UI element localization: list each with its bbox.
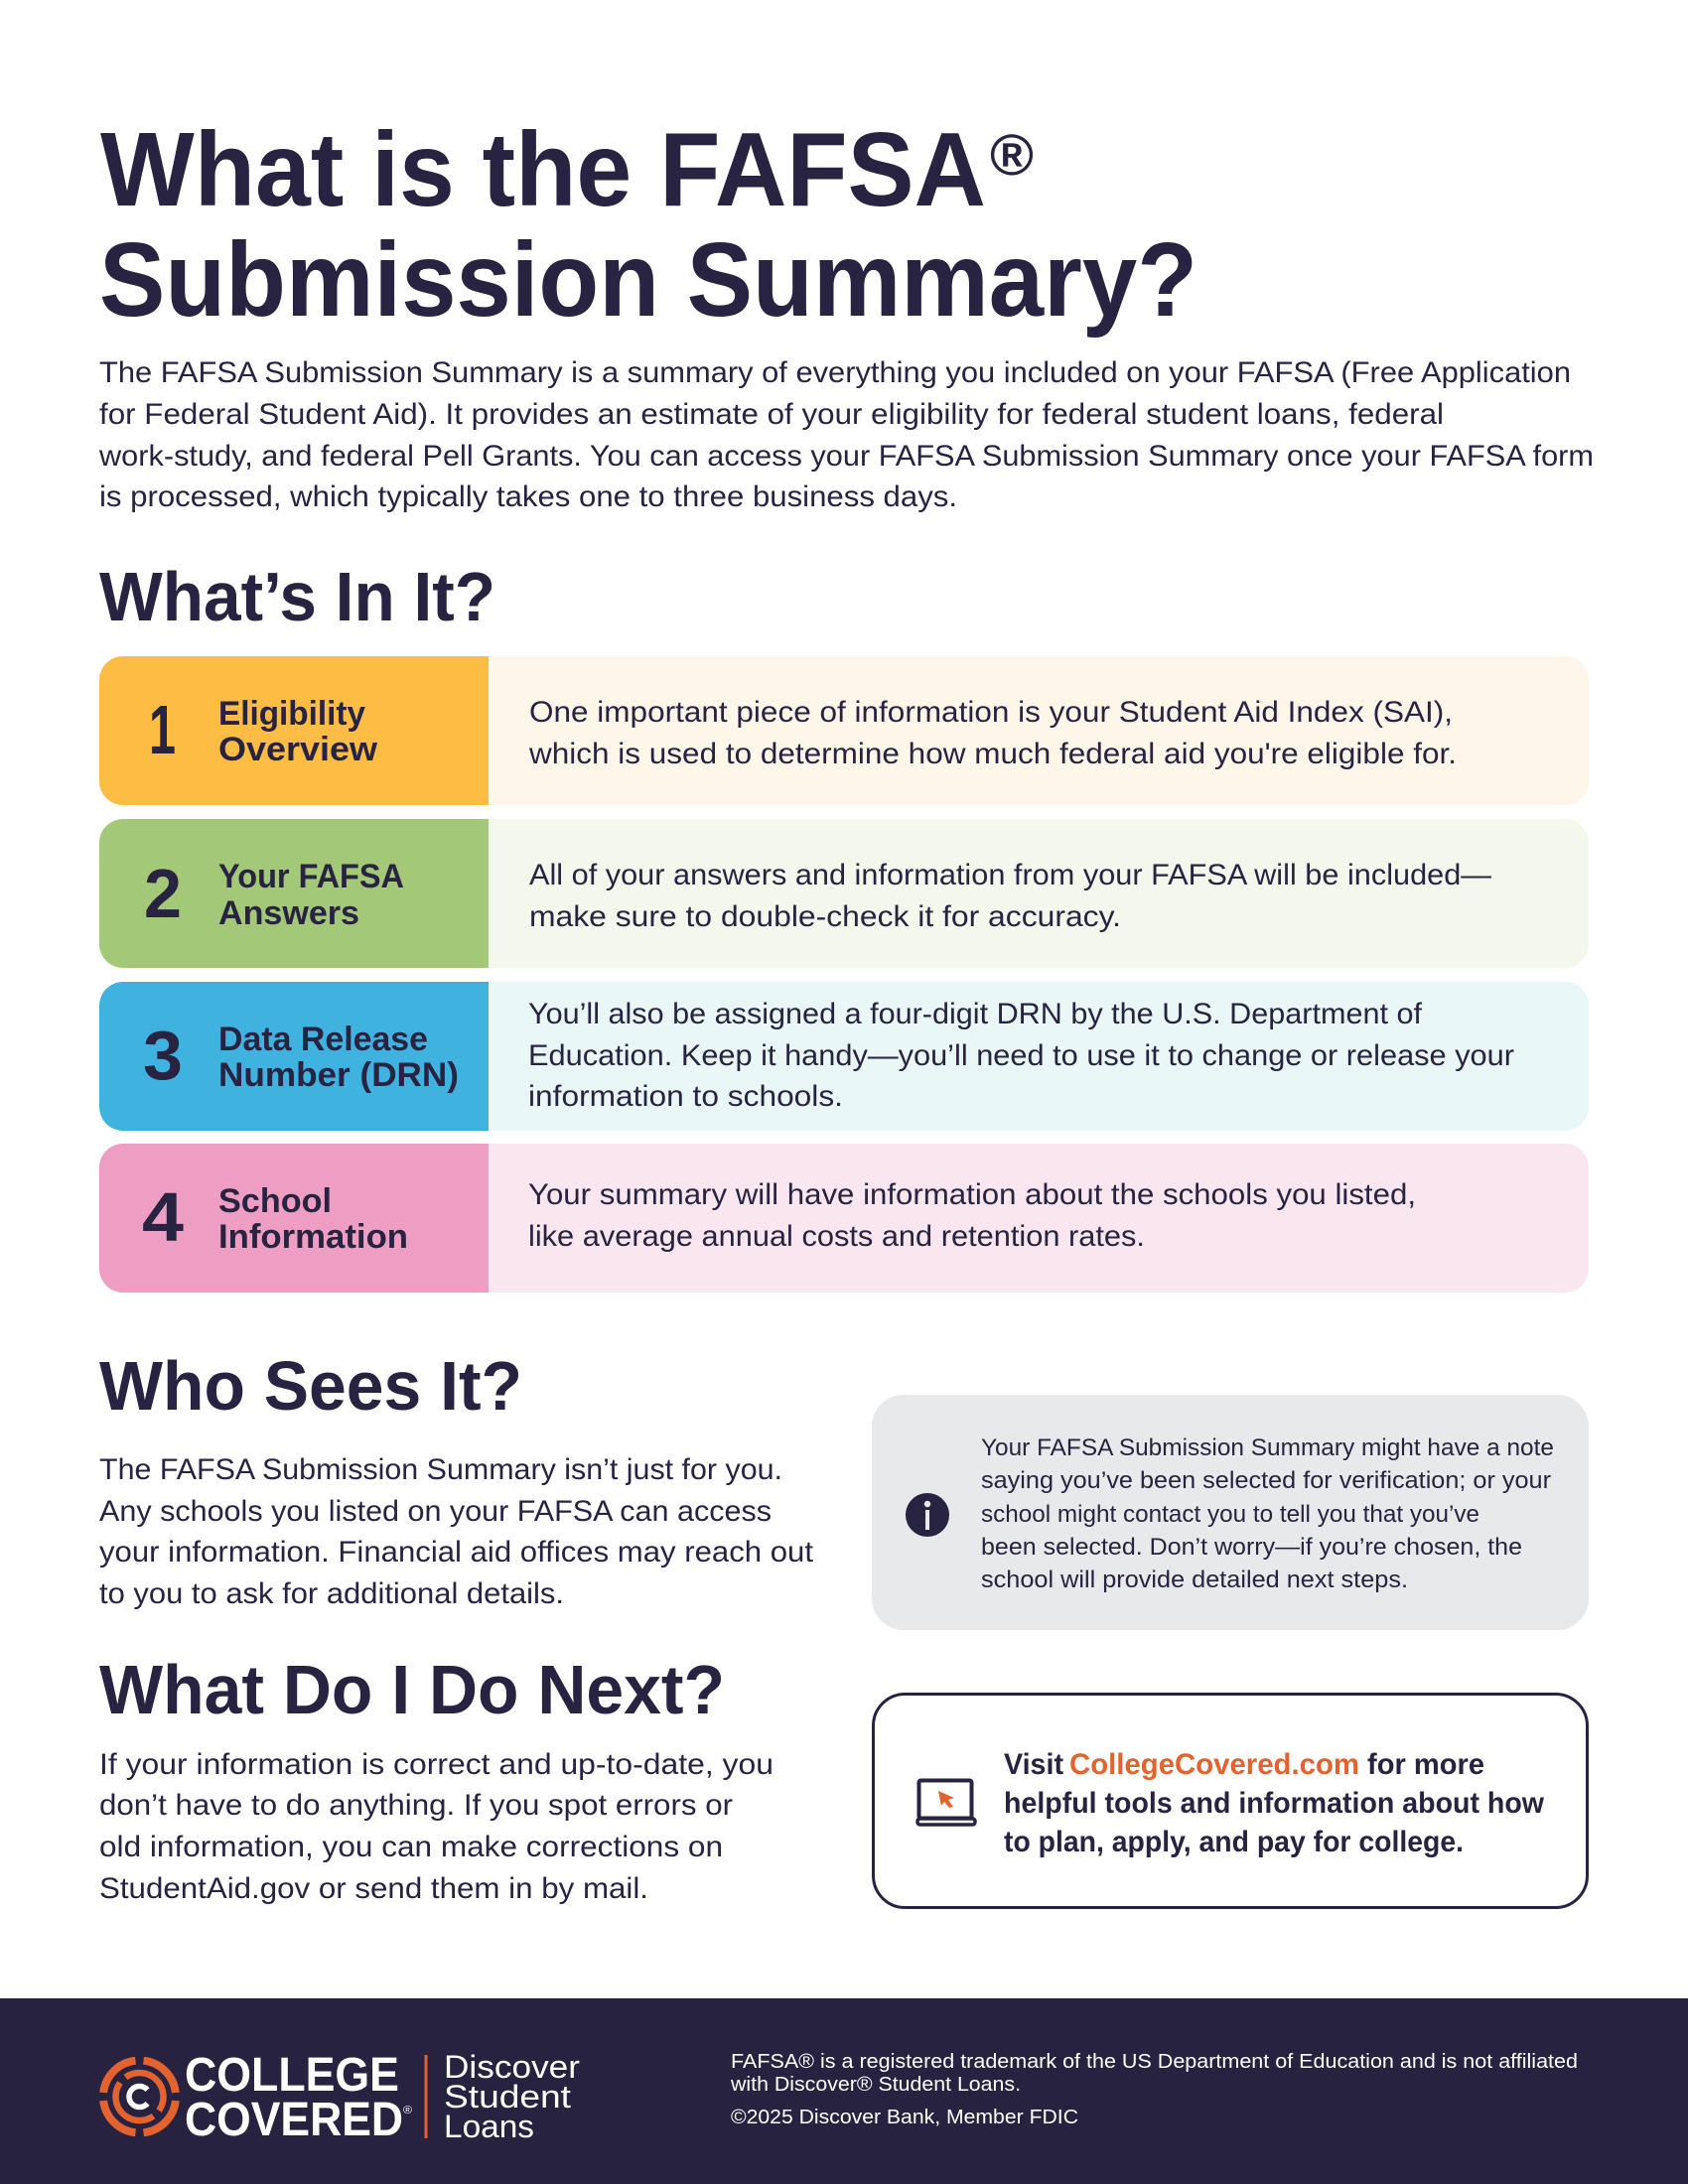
row 2 heading: Your FAFSA <box>218 858 404 895</box>
note text: been selected. Don’t worry—if you’re chosen, the <box>981 1534 1522 1561</box>
text block: what do I do next: old information, you can make corrections on <box>99 1831 723 1863</box>
text block: who sees it: Any schools you listed on your FAFSA can access <box>99 1495 772 1528</box>
row 3 description: information to schools. <box>528 1080 843 1113</box>
panel: visit CollegeCovered callout <box>874 1694 1587 1908</box>
intro paragraph: The FAFSA Submission Summary is a summary of everything you included on your FAFSA (Free Application <box>99 356 1571 389</box>
panel: row 3 data release number <box>99 982 1589 1131</box>
row 1 description <box>528 696 1457 770</box>
row 2 heading <box>218 858 404 932</box>
intro paragraph: is processed, which typically takes one to three business days. <box>99 480 957 513</box>
title <box>99 111 1197 339</box>
note text: school will provide detailed next steps. <box>981 1567 1408 1593</box>
icon: laptop with cursor <box>917 1781 975 1825</box>
note text: saying you’ve been selected for verification; or your <box>981 1467 1551 1494</box>
text block: who sees it: your information. Financial aid offices may reach out <box>99 1536 814 1569</box>
heading: Who Sees It?: Who Sees It? <box>99 1347 522 1425</box>
panel: row 1 eligibility overview <box>99 656 1589 805</box>
row 3 description: Education. Keep it handy—you’ll need to use it to change or release your <box>528 1039 1514 1072</box>
row 2 description: make sure to double-check it for accuracy. <box>529 900 1121 933</box>
panel: row 2 your FAFSA answers <box>99 819 1589 968</box>
row 2 description <box>529 859 1491 933</box>
callout text: helpful tools and information about how <box>1004 1787 1545 1820</box>
legal text: ©2025 Discover Bank, Member FDIC <box>731 2107 1078 2128</box>
text block: what do I do next: don’t have to do anything. If you spot errors or <box>99 1789 733 1822</box>
number 3: 3 <box>143 1017 183 1094</box>
row 3 description <box>528 998 1514 1113</box>
callout text: to plan, apply, and pay for college. <box>1004 1826 1464 1858</box>
title: Submission Summary? <box>99 221 1197 339</box>
row 4 heading: School <box>218 1182 332 1220</box>
wordmark <box>185 2049 412 2146</box>
row 3 heading <box>218 1021 459 1094</box>
note text <box>981 1434 1554 1593</box>
text block: what do I do next: If your information is correct and up-to-date, you <box>99 1748 774 1781</box>
text block: what do I do next <box>99 1748 774 1905</box>
row 4 heading: Information <box>218 1218 408 1256</box>
text block: what do I do next: StudentAid.gov or send them in by mail. <box>99 1872 648 1905</box>
row 4 description: Your summary will have information about the schools you listed, <box>528 1178 1416 1211</box>
row 4 heading <box>218 1182 408 1256</box>
row 3 heading: Number (DRN) <box>218 1056 459 1094</box>
row 1 heading: Eligibility <box>218 695 365 733</box>
row 2 description: All of your answers and information from your FAFSA will be included— <box>529 859 1491 891</box>
footer band <box>0 1998 1688 2184</box>
legal text <box>730 2051 1578 2128</box>
callout text: for more <box>1367 1748 1484 1781</box>
row 1 description: One important piece of information is your Student Aid Index (SAI), <box>529 696 1453 729</box>
row 1 description: which is used to determine how much federal aid you're eligible for. <box>528 738 1457 770</box>
title: ® <box>990 123 1034 188</box>
row 3 heading: Data Release <box>218 1021 428 1058</box>
callout text <box>1004 1748 1545 1858</box>
text block: who sees it: to you to ask for additional details. <box>99 1577 564 1610</box>
number 4: 4 <box>142 1178 184 1256</box>
wordmark: COVERED <box>185 2094 403 2146</box>
note text: Your FAFSA Submission Summary might have a note <box>981 1434 1554 1461</box>
sub-brand: Student <box>444 2079 571 2115</box>
icon: info <box>906 1493 949 1537</box>
sub-brand: Loans <box>444 2109 534 2144</box>
legal text: with Discover® Student Loans. <box>730 2074 1021 2096</box>
sub-brand: Discover <box>444 2049 580 2085</box>
sub-brand <box>444 2049 580 2144</box>
row 3 description: You’ll also be assigned a four-digit DRN by the U.S. Department of <box>528 998 1423 1030</box>
row 2 heading: Answers <box>218 894 359 932</box>
number 2: 2 <box>144 855 182 932</box>
panel: row 4 school information <box>99 1144 1589 1293</box>
logo: College Covered <box>103 2049 580 2146</box>
note text: school might contact you to tell you that you’ve <box>981 1501 1479 1528</box>
heading: What Do I Do Next?: What Do I Do Next? <box>99 1651 725 1728</box>
row 4 description: like average annual costs and retention rates. <box>528 1220 1145 1253</box>
wordmark: ® <box>403 2105 412 2116</box>
icon: concentric rings <box>103 2061 176 2132</box>
row 1 heading: Overview <box>218 731 378 768</box>
title: What is the FAFSA <box>100 111 986 228</box>
intro paragraph <box>98 356 1594 513</box>
heading: What's In It?: What’s In It? <box>99 558 495 635</box>
intro paragraph: for Federal Student Aid). It provides an estimate of your eligibility for federal student loans, federal <box>99 398 1444 431</box>
wordmark: COLLEGE <box>185 2049 399 2102</box>
callout text: CollegeCovered.com <box>1069 1748 1359 1781</box>
row 1 heading <box>218 695 378 768</box>
callout text: Visit <box>1004 1748 1063 1781</box>
row 4 description <box>528 1178 1416 1253</box>
legal text: FAFSA® is a registered trademark of the US Department of Education and is not affiliated <box>731 2051 1578 2073</box>
intro paragraph: work-study, and federal Pell Grants. You can access your FAFSA Submission Summary once your FAFSA form <box>98 440 1594 473</box>
text block: who sees it: The FAFSA Submission Summary isn’t just for you. <box>99 1453 782 1486</box>
text block: who sees it <box>99 1453 814 1610</box>
number 1: 1 <box>149 691 176 768</box>
panel: verification note <box>872 1395 1589 1630</box>
